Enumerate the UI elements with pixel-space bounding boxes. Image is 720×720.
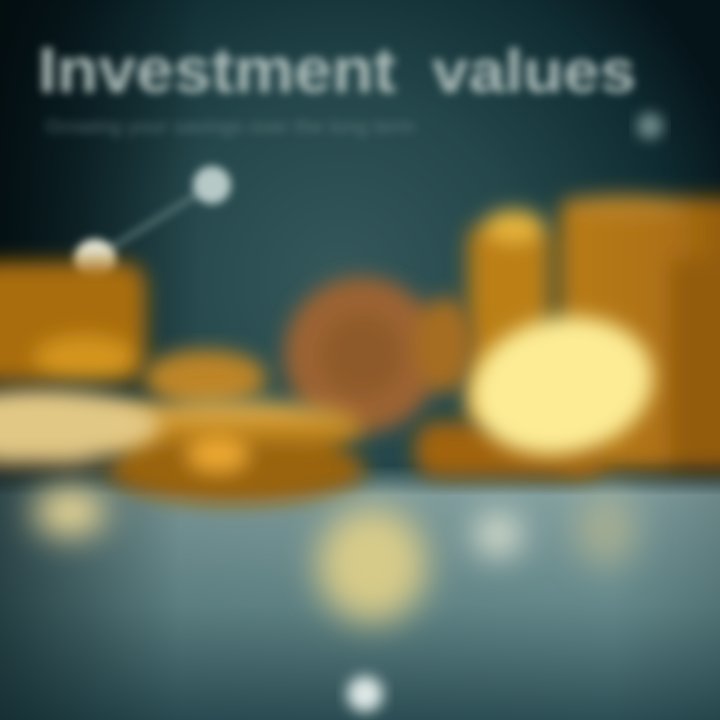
icon: small marker dot — [637, 113, 663, 139]
left coin stack — [0, 262, 146, 382]
floor reflections — [34, 488, 636, 623]
copper coin — [284, 277, 475, 433]
bottom marker dot — [347, 676, 383, 712]
title: Investment — [38, 34, 396, 106]
subtitle: Growing your savings over the long term — [45, 117, 415, 138]
bright coin — [458, 300, 666, 472]
chart line with markers — [74, 166, 231, 281]
pale flat coin — [0, 389, 160, 473]
large foreground coin — [87, 400, 366, 504]
middle coin pile — [143, 350, 267, 406]
reflective floor — [0, 465, 720, 720]
right coin stacks — [468, 195, 720, 470]
title: values — [432, 38, 636, 105]
lower right coin — [415, 422, 605, 478]
title — [38, 34, 636, 106]
